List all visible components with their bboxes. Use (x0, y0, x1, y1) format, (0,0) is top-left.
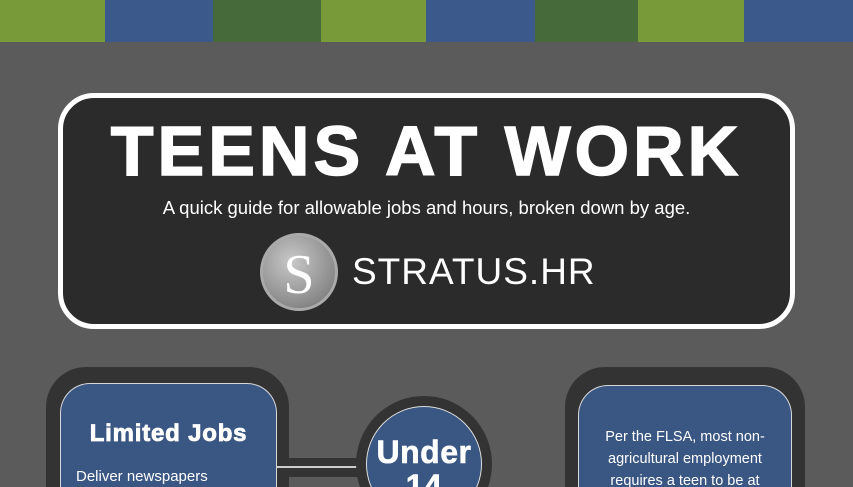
icon: stratus logo circle (260, 233, 338, 311)
title: TEENS AT WORK (111, 112, 742, 190)
age label (377, 435, 471, 487)
text: Per the FLSA, most non- (605, 429, 765, 445)
header panel (58, 93, 795, 329)
inner blue card (60, 383, 277, 487)
age label: Under (377, 435, 471, 470)
text (605, 429, 765, 487)
logo (260, 233, 596, 311)
icon: stratus logo circle: S (283, 244, 315, 306)
age circle (356, 396, 492, 487)
panel: FLSA note (565, 367, 805, 487)
text: Deliver newspapers (76, 468, 208, 485)
panel: limited jobs (46, 367, 289, 487)
connector (277, 458, 367, 477)
logo text: STRATUS.HR (352, 251, 596, 292)
top color stripes (0, 0, 853, 42)
heading: Limited Jobs (90, 420, 247, 447)
text: agricultural employment (608, 451, 762, 467)
subtitle: A quick guide for allowable jobs and hours, broken down by age. (163, 197, 690, 218)
